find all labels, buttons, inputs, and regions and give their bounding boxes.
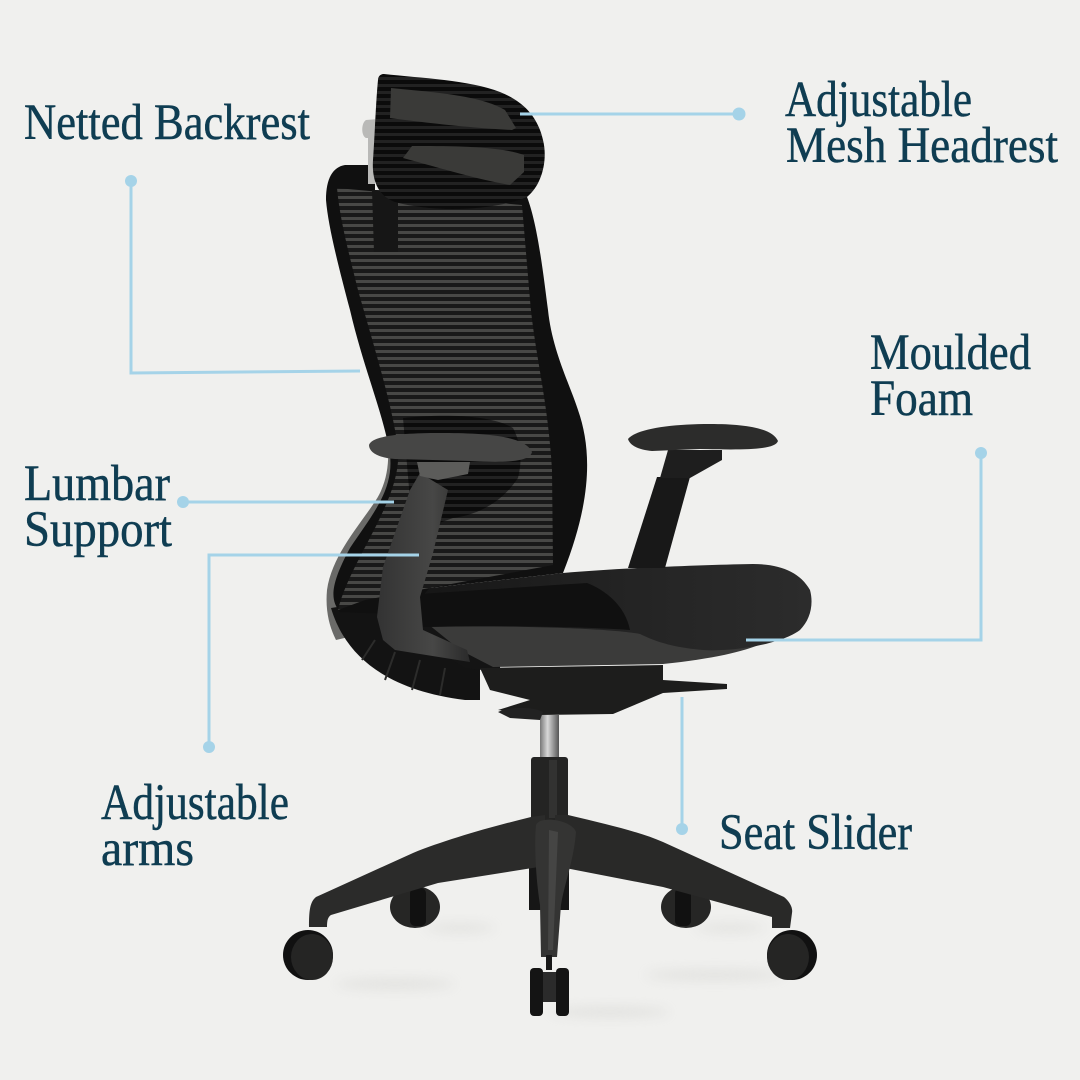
chair: seat front lobe — [419, 583, 630, 630]
chair: mesh backrest — [326, 165, 587, 615]
chair: seat cushion — [420, 564, 812, 650]
chair: headrest bracket — [362, 119, 378, 184]
label: lumbar support — [24, 456, 172, 558]
label: adjustable mesh headrest: Adjustable — [785, 72, 972, 128]
chair: backrest frame — [327, 410, 420, 640]
chair: right armrest — [628, 424, 778, 568]
label: moulded foam: Foam — [870, 371, 973, 427]
label: lumbar support: Lumbar — [24, 456, 170, 512]
label: adjustable arms — [101, 775, 289, 877]
chair: side casters — [283, 930, 817, 1016]
chair: left armrest — [369, 433, 532, 662]
chair: gas lift cylinder — [531, 715, 568, 831]
label: netted backrest: Netted Backrest — [24, 95, 310, 151]
chair: headrest — [373, 74, 545, 209]
chair: lumbar pad — [403, 416, 521, 530]
callout dots — [125, 108, 987, 835]
chair: seat pan — [423, 620, 770, 667]
chair: lower frame — [331, 605, 480, 700]
chair — [283, 74, 817, 1016]
leader: adjustable mesh headrest — [520, 112, 739, 116]
label: moulded foam: Moulded — [870, 325, 1031, 381]
label: adjustable mesh headrest — [785, 72, 1058, 174]
chair: mesh panel — [337, 188, 553, 610]
chair: seat backing — [420, 615, 500, 672]
leader: moulded foam — [746, 453, 981, 640]
label: moulded foam — [870, 325, 1031, 427]
leader: seat slider — [680, 697, 684, 829]
leader: netted backrest — [131, 181, 360, 373]
floor shadows — [335, 924, 785, 1017]
chair: rear casters — [390, 886, 711, 928]
label: seat slider: Seat Slider — [719, 805, 912, 861]
chair: seat mechanism — [480, 665, 727, 720]
leader: lumbar support — [183, 500, 394, 504]
label: adjustable arms: arms — [101, 821, 194, 877]
leader: adjustable arms — [209, 555, 419, 747]
chair: five-star base — [309, 815, 792, 970]
label: adjustable arms: Adjustable — [101, 775, 289, 831]
label: lumbar support: Support — [24, 502, 172, 558]
callout lines — [131, 114, 981, 829]
